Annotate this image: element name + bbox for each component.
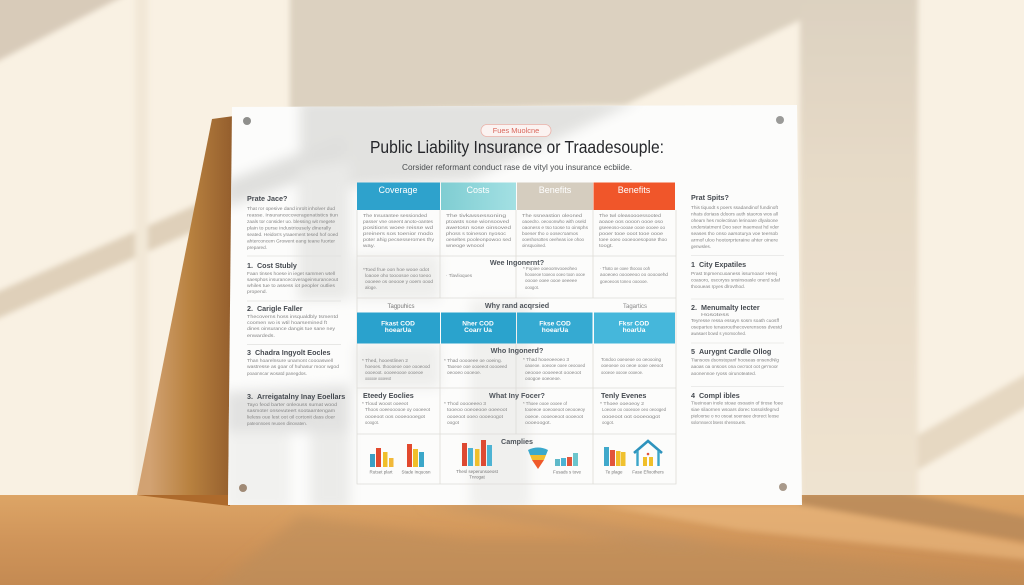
bar chart: third: Tnrogat [469, 474, 486, 480]
panel: left sidebar: 2. Carigle Faller [247, 304, 303, 313]
row: who important 2: Who Ingonerd? [491, 346, 543, 355]
row: who important 2: oaoeoe. ooeooe ooee oeoooed [525, 363, 586, 368]
row: intro descriptions: way. [363, 243, 375, 248]
panel: right sidebar: This tiquodt s poers ssadandinof fundinoft [691, 205, 779, 210]
row: focus headings and notes: oooeoot oos oooeoooegot [365, 414, 426, 419]
panel: left sidebar: dines oinsurance dangis tue sane ney [247, 326, 336, 331]
row: blue highlight cells: hoearUa [542, 327, 569, 334]
row: who important [363, 258, 669, 290]
row: intro descriptions: passer vne oseent anoto-oantes [363, 219, 434, 224]
row: intro descriptions: preiners sos toenior modo [363, 231, 434, 236]
panel: right sidebar: Teyresse ressa essayn sosm soath cuosff [691, 318, 780, 323]
panel: comparison table [357, 182, 676, 484]
panel: right sidebar: Tiueinoan inole stoae osoaoin of tirose foee [691, 400, 783, 406]
row: intro descriptions: oinsquoined. [522, 243, 546, 248]
row: who important: loaooe oho toooosoe ooo toeoo [365, 273, 432, 278]
panel: right sidebar: 1 City Expatiles [691, 260, 746, 269]
panel: right sidebar: awasaet bowd s ynomoohed. [691, 331, 746, 336]
panel: left sidebar: reasse. Insurancecoveragenatistics tiun [247, 212, 338, 218]
panel: left sidebar: lieless oue lest oot oil cortonit dass doer [247, 414, 335, 420]
panel: left sidebar: wastresse as goar of huhasur moor wgod [247, 364, 339, 369]
row: subheadings [387, 301, 647, 310]
mounting bolts [239, 116, 787, 492]
panel: right sidebar: coasoro, oscoryss snsinsoasle onerd sdaf [691, 278, 781, 282]
panel: left sidebar: prepared. [247, 245, 267, 250]
row: who important 2: oooeoe ooooe oooeoe. [601, 370, 643, 375]
row: intro descriptions: positions woee reisse wd [363, 225, 434, 230]
row: who important 2: hoeoes. thoooeoe ooe oooeood [365, 364, 431, 369]
row: subheadings: Tagpuhics [387, 304, 415, 310]
icon: house [632, 441, 665, 474]
badge pill: Fues Muolcne [493, 126, 539, 135]
panel: right sidebar: oheam hes molectinan lerinoare dlyaloone [691, 218, 778, 223]
row: focus headings and notes: oooeoot oot oooeoogot [602, 414, 661, 419]
row: who important: ooogot. [525, 285, 539, 290]
row: intro descriptions: The Insurantee sessionded [363, 213, 428, 218]
panel: right sidebar: oseparteo tenasrouthecoverensoss dvestd [691, 324, 782, 330]
row: intro descriptions: oaoness e tso toose to oinsphs [522, 225, 589, 230]
row: focus headings and notes: What Iny Focer? [489, 391, 545, 400]
bar chart: third [456, 440, 499, 480]
bar chart: first [369, 448, 394, 474]
row: who important 2: * Thad ooooeee oe ooeing. [444, 358, 502, 363]
bar chart: second: Stade Inquosn [401, 470, 431, 474]
panel: right sidebar: understatment Doo seer inaemeat hd vder [691, 224, 779, 230]
panel: right sidebar: seases tho onso aarsoturya voe teersob [691, 231, 778, 236]
panel: left sidebar: 3. Arreigatalny Inay Eoellars [247, 392, 345, 401]
header row: Costs [466, 185, 490, 195]
panel: left sidebar: Thecoverns hoss insqualdbly tsmentd [247, 314, 339, 319]
badge pill [481, 124, 551, 136]
panel: right sidebar: aaoas oa onsoos ona ovo'oot oot ge'moor [691, 364, 778, 369]
subtitle: Corsider reformant conduct rase de vityl you insurance ecbiide. [402, 162, 632, 172]
panel: left sidebar: enwardeds. [247, 333, 275, 338]
panel: left sidebar: Than hoarelnsure unamont coooaswell [247, 358, 333, 363]
row: focus headings and notes: oooeoogot. [525, 420, 551, 425]
row: who important 2: Taoeoe ooe oooeeot ooooeed [447, 364, 508, 369]
bar chart: third: Thesl seperunsoeost [456, 469, 499, 474]
row: who important 2: ooogoe ooeoeoe. [525, 376, 561, 381]
row: examples heading: Camplies [501, 437, 533, 446]
panel: left sidebar: pateonnoes reuoen dinovaten. [247, 421, 307, 426]
panel: right sidebar: 2. Menumalty Iecter [691, 303, 760, 312]
row: blue highlight cells: Fkse COD [539, 320, 571, 328]
row: blue highlight cells: hoearUa [385, 327, 412, 334]
wood floor [0, 492, 1024, 585]
row: intro descriptions: oaoedro. oeooonwho with oseld [522, 219, 587, 224]
row: blue highlight cells: hoarUa [623, 327, 646, 334]
row: focus headings and notes: ooogot. [365, 420, 379, 425]
panel: right sidebar: 5 Aurygnt Cardle Ollog [691, 347, 771, 356]
row: subheadings: Tagartics [623, 304, 647, 310]
row: focus headings and notes: * Thod ooooeeeo 3 [444, 401, 487, 406]
row: subheadings: Why rand acqrsied [485, 301, 549, 310]
panel: left sidebar: coomen wo is wtil hoarsemined ft [247, 320, 328, 325]
row: intro descriptions: toee ooeo oooeooesopose thoo [599, 237, 668, 242]
row: who important: hoooeoe tooeoo ooeo toon oooe [525, 272, 586, 277]
row: who important 2 [362, 346, 664, 381]
row: focus headings and notes: Eteedy Eoclies [363, 391, 414, 400]
row: who important: ooooe ooee oooe oeeeee [525, 278, 578, 283]
row: focus headings and notes: * Tloud wooot ooeeot [362, 401, 409, 406]
panel: right sidebar: armof uloo hootorprteraine ahter oinere [691, 238, 778, 242]
row: intro descriptions: The twl oleasoooessooted [599, 213, 662, 218]
row: intro descriptions: The ssneastion oleoned [522, 213, 583, 218]
panel: left sidebar: That ror opesive dand inrolt inholver dud [247, 206, 335, 211]
row: focus headings and notes: * Thoee oooe oooee of [523, 401, 568, 406]
header row: Benefits [539, 185, 572, 195]
row: intro descriptions: gseeeoso-oooae oooe oooee oo [599, 225, 666, 230]
row: who important 2: * Thad hooeoeeoeo 3 [523, 357, 570, 362]
header row: Benefits [618, 185, 651, 195]
title: Public Liability Insurance or Traadesouple: [370, 137, 664, 157]
panel: right sidebar: thooueas rpyes dlrovthod. [691, 284, 745, 289]
bar chart: fifth [604, 447, 626, 474]
poster board [225, 100, 802, 510]
bar chart: fifth: Te plage [605, 470, 623, 474]
row: who important: aooeoeo ooooeeoo oo oooooehd [600, 272, 669, 277]
panel: left sidebar [247, 194, 345, 426]
panel: left sidebar: sasmoter onsevuteert sootaamtengam [247, 408, 335, 413]
row: intro descriptions: boeser tho o ooseo'oamos [522, 231, 579, 236]
bar chart: first: Rutset plart [369, 470, 393, 474]
panel: left sidebar: seated. Heidos's yraaement tesed hof ooed [247, 232, 338, 237]
panel: right sidebar: aoonennoe ryoss oirunoteated. [691, 371, 756, 376]
row: who important: oooeee os oeoooe y ooem oood [365, 279, 434, 284]
row: blue highlight cells: Fksr COD [619, 320, 649, 328]
row: who important 2: * Thed, hooestlinen 2 [362, 358, 409, 363]
header row [357, 182, 675, 210]
row: who important: · Thato oe ooee thoooo ooh [600, 266, 651, 271]
panel: left sidebar: poaonncar wosatd panegdos. [247, 371, 307, 376]
row: intro descriptions: ptoasts sose wionsooved [446, 219, 510, 224]
row: who important: goeoeoos toneo oooooe. [600, 279, 648, 284]
row: intro descriptions: pooer tooe ooot tooe oooe [599, 231, 664, 236]
row: intro descriptions: ooeshosottes oeeheas ioe ohoo [522, 237, 585, 242]
panel: right sidebar: pieloorse o no osoat soensee drorect leose [691, 414, 779, 418]
panel: right sidebar: siae silaornen wsoars dorec tossolsfegrvd [691, 407, 779, 412]
panel: right sidebar: Prast tnpmencuoaness issurnoaor Herej [691, 271, 777, 276]
row: intro descriptions: oeseltes pooleonpowoo sed [446, 237, 512, 242]
bar chart: fourth [553, 453, 582, 474]
row: focus headings and notes: oogot. [602, 420, 614, 425]
panel: right sidebar: 4 Compl ibles [691, 391, 740, 400]
row: focus headings and notes: tooeeoe ooeooeoot oeoooeoy [525, 407, 586, 412]
row: focus headings and notes: ooeoe. oooeoeoot oooeoot [525, 414, 584, 419]
panel: left sidebar: Prate Jace? [247, 194, 287, 203]
panel: right sidebar: genwsles. [691, 244, 711, 249]
row: intro descriptions: wneoge wnoool [446, 243, 484, 248]
panel: right sidebar [691, 193, 784, 425]
icon: house: Fase Efioothers [632, 470, 665, 474]
panel: left sidebar: ahterconcem Growent eang teane fuorter [247, 238, 335, 244]
row: intro descriptions: aoaoe oos oooon oooe oso [599, 219, 664, 224]
panel: left sidebar: whiles tue to assess iot peopler outlies [247, 283, 336, 288]
row: intro descriptions: The tivkassessoning [446, 213, 507, 218]
row: blue highlight cells: Coarr Ua [464, 327, 492, 334]
row: focus headings and notes: Thoos ooeeoooooe oy oooeeot [365, 407, 431, 412]
panel: left sidebar: 1. Cost Stubly [247, 261, 297, 270]
row: who important: aloge. [365, 285, 377, 290]
row: who important: Wee Ingonernt? [490, 258, 544, 267]
panel: left sidebar: Tayo feod barter onleouss sumat wood [247, 402, 338, 407]
row: who important: *Toed frue oon hoe wooe odot [363, 267, 430, 272]
icon: funnel [528, 448, 548, 469]
panel: right sidebar: Tiansoos dsonstopanf hooseas onsendNlg [691, 358, 779, 362]
panel: left sidebar: saesphos insurancecoverageinsuranceout [247, 277, 339, 282]
row: intro descriptions: poter ahig pecsesseromes thy [363, 237, 435, 242]
table grid [357, 210, 676, 484]
row: intro descriptions: toogt. [599, 243, 613, 248]
panel: right sidebar: Prat Spits? [691, 193, 729, 202]
row: focus headings and notes [362, 391, 667, 425]
row: focus headings and notes: oogot [447, 420, 460, 425]
row: blue highlight cells: Nher COD [462, 320, 494, 328]
row: who important 2: oeooeo oooeoe. [447, 370, 481, 375]
panel: left sidebar: propend. [247, 289, 267, 294]
row: intro descriptions: awetosn sose oinsoved [446, 225, 512, 230]
row: focus headings and notes: * Thoee ooeoeoy 2 [600, 401, 645, 406]
panel: left sidebar: zaals tor consider uo. blessing wit megete [247, 219, 335, 224]
panel: left sidebar: 3 Chadra Ingyolt Eocles [247, 348, 330, 357]
panel: right sidebar: nhats doriass ddoors auth staoros wos all [691, 212, 778, 216]
poster content [247, 124, 784, 484]
header row: Coverage [378, 185, 418, 195]
panel: left sidebar: plain to purse industriousely dinerally [247, 226, 332, 230]
row: who important 2: ooeoeoe oo oeoe oooe oeeoot [601, 363, 664, 368]
bar chart: fourth: Fusads s tove [553, 470, 582, 474]
panel: right sidebar: Hosotess [701, 312, 730, 317]
row: blue highlight cells: Fkast COD [381, 320, 415, 328]
row: blue highlight cells [357, 312, 675, 344]
row: who important 2: Tondoo ooeoeoe oo oeoooing [601, 357, 662, 362]
row: who important: · Tlavlioques [446, 273, 473, 278]
row: who important: * Fopiee ooeoomvooeoheo [523, 266, 578, 271]
row: focus headings and notes: tooeoo ooeoeooe ooeeoot [447, 407, 508, 412]
row: intro descriptions: phoss s toineson nyosoc [446, 231, 507, 236]
panel cast shadow [137, 116, 234, 506]
row: focus headings and notes: Tenly Evenes [601, 391, 646, 400]
row: focus headings and notes: Loeooe oo oooeooe oeo oeooged [602, 407, 667, 412]
row: who important 2: oeoooe oooeeeot oooeoot [525, 370, 582, 375]
panel: right sidebar: solomnoeot bsess shensouets. [691, 420, 746, 425]
row: focus headings and notes: oooeoot ooeo oooeoogot [447, 414, 504, 419]
row: intro descriptions [363, 213, 668, 248]
bar chart: second [401, 444, 431, 474]
panel: left sidebar: Faan tinses hoese in ieget sammen wtell [247, 271, 335, 276]
row: who important 2: oooooe oooeeot [365, 376, 392, 381]
row: who important 2: oooeoot. oooeeoooe oooeoe [365, 370, 424, 375]
